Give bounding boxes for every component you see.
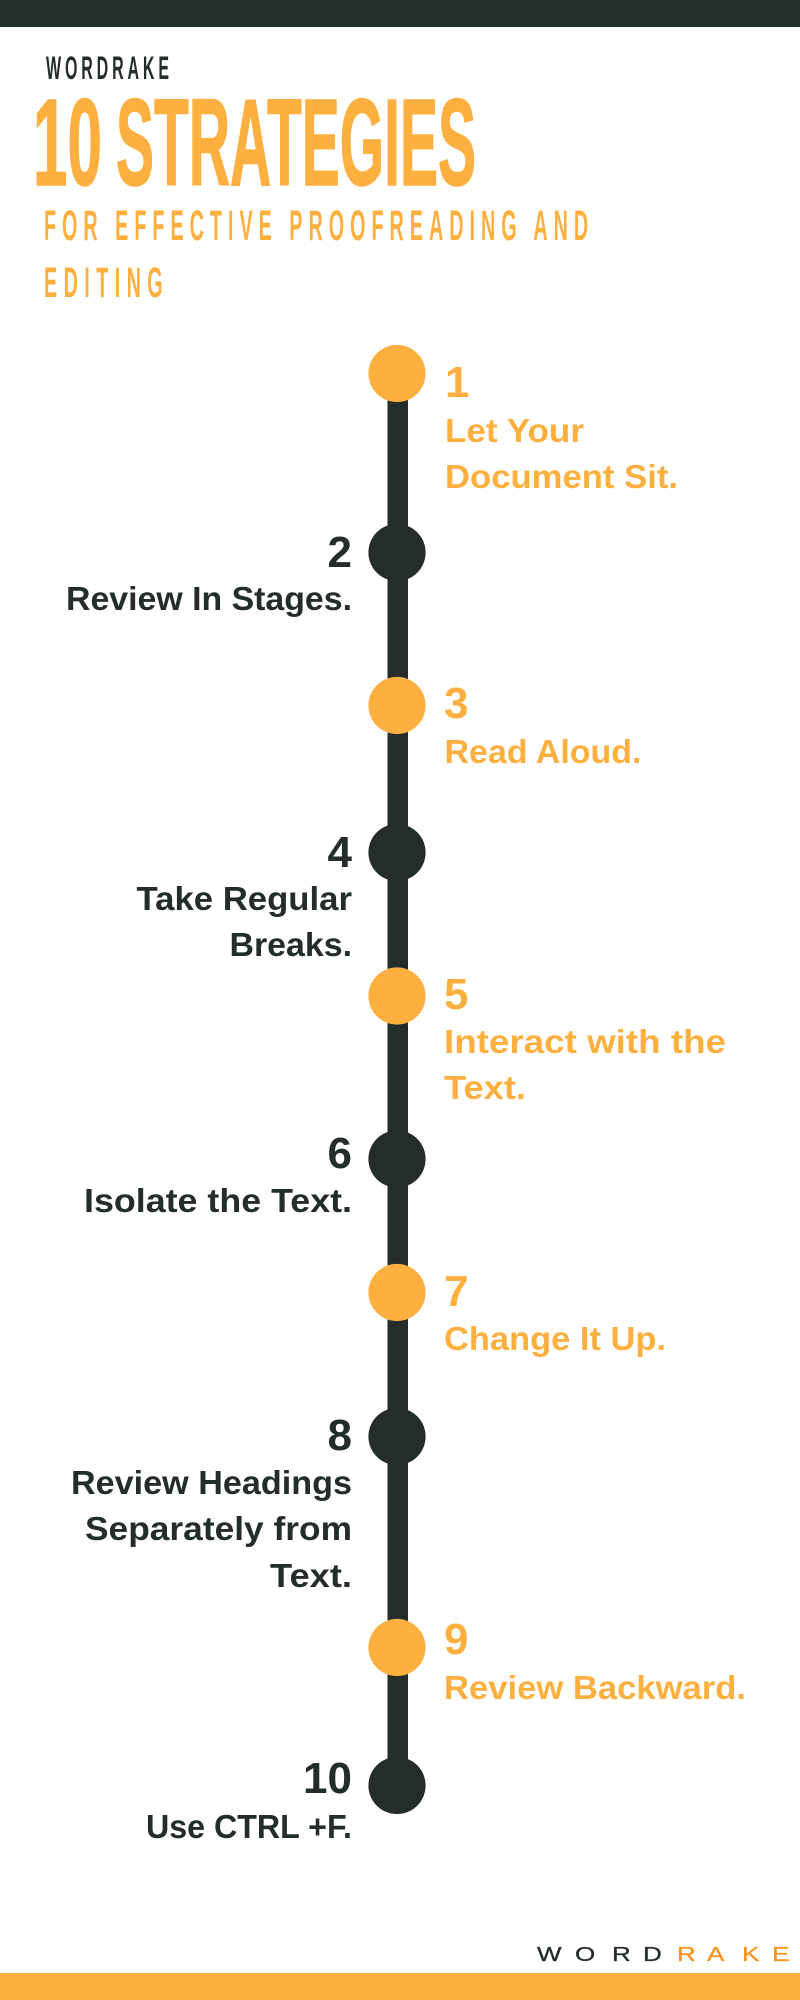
marker 9	[368, 1619, 426, 1676]
footer logo: WORD	[537, 1943, 662, 1965]
number 10: 10	[303, 1754, 352, 1803]
label 4 line 1: Take Regular	[136, 880, 352, 917]
bottom bar	[0, 1973, 800, 2000]
step 9	[368, 1615, 746, 1706]
number 4: 4	[328, 828, 353, 877]
label 7: Change It Up.	[444, 1320, 666, 1357]
label 8 line 3: Text.	[270, 1557, 352, 1594]
number 5: 5	[444, 970, 468, 1019]
label 8 line 2: Separately from	[85, 1510, 352, 1547]
number 9: 9	[444, 1615, 468, 1664]
marker 7	[368, 1264, 426, 1321]
number 3: 3	[444, 679, 468, 728]
step 5	[368, 967, 726, 1106]
timeline line	[388, 385, 408, 1785]
step 4	[136, 824, 426, 963]
marker 10	[368, 1757, 426, 1814]
brand label: WORDRAKE	[46, 51, 169, 87]
step 7	[368, 1264, 666, 1357]
top bar	[0, 0, 800, 27]
label 3: Read Aloud.	[444, 733, 642, 770]
subtitle line 2: EDITING	[44, 260, 163, 307]
footer logo	[537, 1943, 791, 1965]
marker 5	[368, 967, 426, 1025]
label 10: Use CTRL +F.	[146, 1808, 352, 1845]
marker 3	[368, 677, 426, 734]
label 1 line 1: Let Your	[445, 412, 584, 449]
header block	[33, 51, 588, 307]
step 10	[146, 1754, 426, 1845]
step 1	[368, 345, 678, 495]
number 1: 1	[445, 358, 469, 407]
subtitle line 1: FOR EFFECTIVE PROOFREADING AND	[44, 203, 588, 250]
number 6: 6	[328, 1129, 352, 1178]
number 7: 7	[444, 1267, 468, 1316]
label 2: Review In Stages.	[66, 580, 352, 617]
marker 4	[368, 824, 426, 881]
footer logo: .	[788, 1954, 791, 1963]
step 2	[66, 524, 426, 617]
marker 8	[368, 1408, 426, 1465]
marker 1	[368, 345, 426, 402]
title number: 10	[33, 75, 102, 212]
marker 6	[368, 1130, 426, 1188]
label 5 line 2: Text.	[444, 1069, 526, 1106]
label 1 line 2: Document Sit.	[445, 458, 678, 495]
step 3	[368, 677, 642, 770]
step 6	[84, 1129, 426, 1219]
label 9: Review Backward.	[444, 1669, 746, 1706]
step 8	[71, 1408, 426, 1594]
label 8 line 1: Review Headings	[71, 1464, 352, 1501]
footer logo: RAKE	[677, 1943, 789, 1965]
number 2: 2	[328, 528, 352, 577]
number 8: 8	[328, 1411, 352, 1460]
label 6: Isolate the Text.	[84, 1182, 352, 1219]
marker 2	[368, 524, 426, 581]
label 5 line 1: Interact with the	[444, 1023, 726, 1060]
label 4 line 2: Breaks.	[230, 926, 352, 963]
